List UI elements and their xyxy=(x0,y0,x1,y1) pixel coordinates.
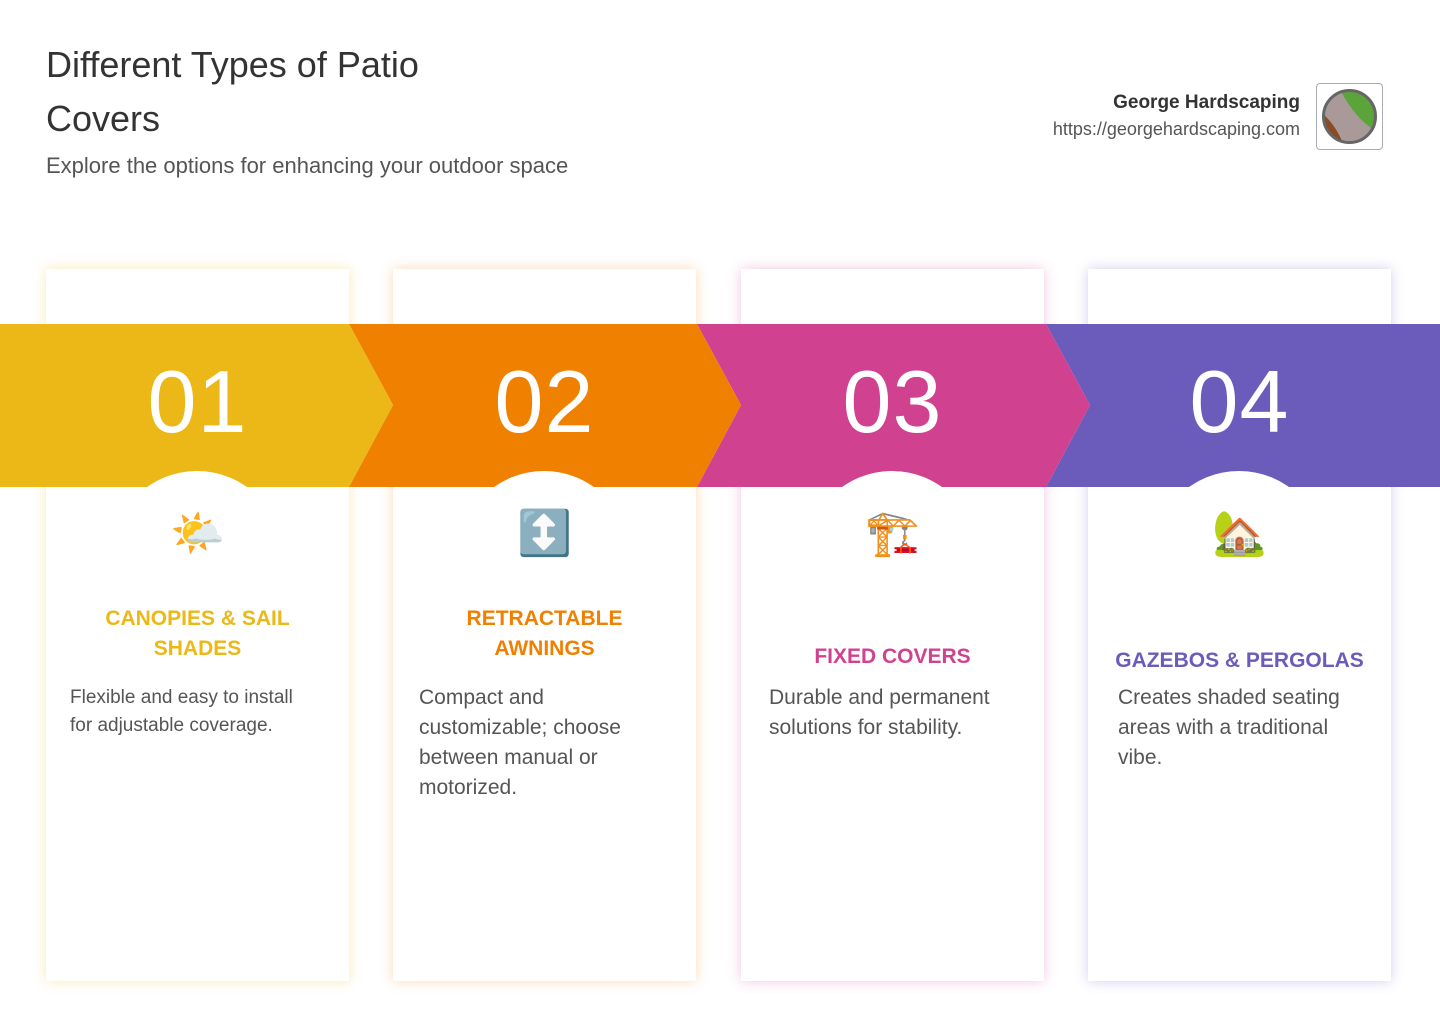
text 3 xyxy=(769,686,990,739)
icon: crane: 🏗️ xyxy=(865,507,920,559)
text: 02 xyxy=(495,352,594,451)
text 2 xyxy=(419,686,621,799)
icon: up down arrow: ↕️ xyxy=(517,507,572,559)
arrow band xyxy=(0,324,1440,487)
subtitle: Explore the options for enhancing your outdoor space xyxy=(46,153,568,178)
text 3: solutions for stability. xyxy=(769,716,962,739)
text: 04 xyxy=(1190,352,1289,451)
text 4 xyxy=(1118,686,1340,769)
title: Different Types of Patio Covers xyxy=(46,44,419,139)
numbers: 01 xyxy=(148,352,247,451)
text 4: Creates shaded seating xyxy=(1118,686,1340,709)
text 1 xyxy=(70,687,293,736)
text 2: customizable; choose xyxy=(419,716,621,739)
text 2: between manual or xyxy=(419,746,598,769)
heading 2: AWNINGS xyxy=(494,637,595,660)
text 1: Flexible and easy to install xyxy=(70,687,293,708)
brand text xyxy=(1053,92,1300,139)
card 3 xyxy=(741,269,1044,981)
text: 03 xyxy=(843,352,942,451)
heading 3: FIXED COVERS xyxy=(814,645,971,668)
heading 2: RETRACTABLE xyxy=(467,607,622,630)
text 3: Durable and permanent xyxy=(769,686,990,709)
icon: house: 🏡 xyxy=(1212,507,1267,559)
brand text: George Hardscaping xyxy=(1113,92,1300,113)
text 1: for adjustable coverage. xyxy=(70,715,273,736)
text 4: areas with a traditional xyxy=(1118,716,1328,739)
heading 1: CANOPIES & SAIL xyxy=(105,607,290,630)
text 2: Compact and xyxy=(419,686,544,709)
card 1 xyxy=(46,269,349,981)
heading 2 xyxy=(467,607,622,660)
text 4: vibe. xyxy=(1118,746,1162,769)
logo xyxy=(1316,83,1383,150)
icon: sun cloud: 🌤️ xyxy=(170,507,225,559)
heading 1 xyxy=(105,607,290,660)
heading 1: SHADES xyxy=(154,637,241,660)
brand text: https://georgehardscaping.com xyxy=(1053,119,1300,139)
card 2 xyxy=(393,269,696,981)
text 2: motorized. xyxy=(419,776,517,799)
heading 4: GAZEBOS & PERGOLAS xyxy=(1115,649,1364,672)
card 4 xyxy=(1088,269,1391,981)
